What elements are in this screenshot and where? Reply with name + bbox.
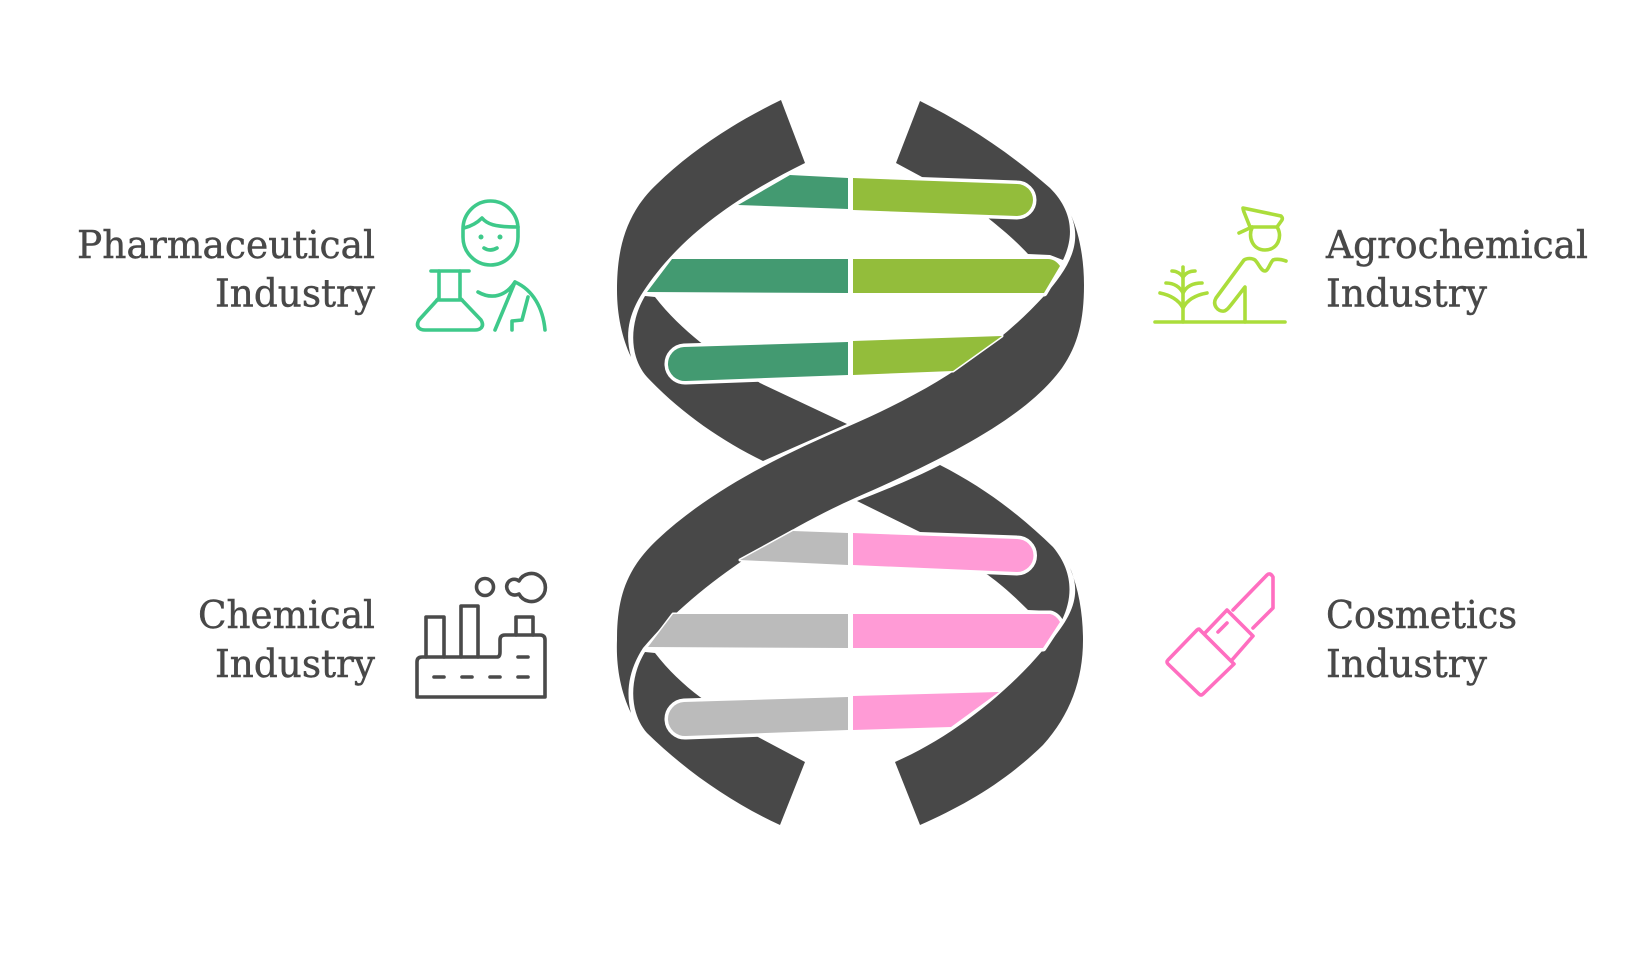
bar: pink middle <box>853 614 1060 648</box>
bar: gray middle <box>648 614 848 648</box>
strand: upper left band <box>617 100 805 357</box>
strand: middle left band <box>633 296 847 461</box>
bar: lime middle <box>853 259 1060 293</box>
bar: green top <box>738 175 848 209</box>
label: Agrochemical Industry: Agrochemical <box>1325 223 1588 267</box>
strand: lower right middle band <box>857 465 1069 620</box>
bar: green middle <box>647 259 848 293</box>
DNA helix <box>617 100 1084 825</box>
label: Chemical Industry: Chemical <box>198 593 375 637</box>
bar: gray bottom <box>668 697 848 736</box>
label: Pharmaceutical Industry <box>77 223 376 316</box>
bar: pink top <box>853 533 1034 572</box>
strand: upper right band <box>896 101 1070 260</box>
label: Cosmetics Industry: Cosmetics <box>1326 593 1517 637</box>
strand: crossing band <box>617 213 1084 713</box>
bar: lime bottom <box>853 336 1002 375</box>
label: Cosmetics Industry: Industry <box>1326 642 1488 686</box>
icon: factory <box>417 574 545 697</box>
strand: lower left band <box>633 652 805 825</box>
icon: farmer with plant <box>1155 208 1286 322</box>
label: Chemical Industry <box>198 593 376 686</box>
strand: lower right band <box>895 568 1083 825</box>
label: Cosmetics Industry <box>1326 593 1517 686</box>
icon: lipstick <box>1167 574 1273 695</box>
bar: green bottom <box>668 342 848 381</box>
bar: gray top <box>740 531 848 565</box>
bar: lime top <box>853 178 1033 216</box>
bars: green and lime rungs <box>647 175 1060 381</box>
label: Pharmaceutical Industry: Pharmaceutical <box>77 223 375 267</box>
label: Agrochemical Industry <box>1325 223 1588 316</box>
label: Chemical Industry: Industry <box>215 642 376 686</box>
bar: pink bottom <box>853 692 999 730</box>
bars: gray and pink rungs <box>648 531 1060 736</box>
icon: pharmacist with flask <box>418 201 545 330</box>
label: Agrochemical Industry: Industry <box>1326 272 1488 316</box>
label: Pharmaceutical Industry: Industry <box>215 272 376 316</box>
